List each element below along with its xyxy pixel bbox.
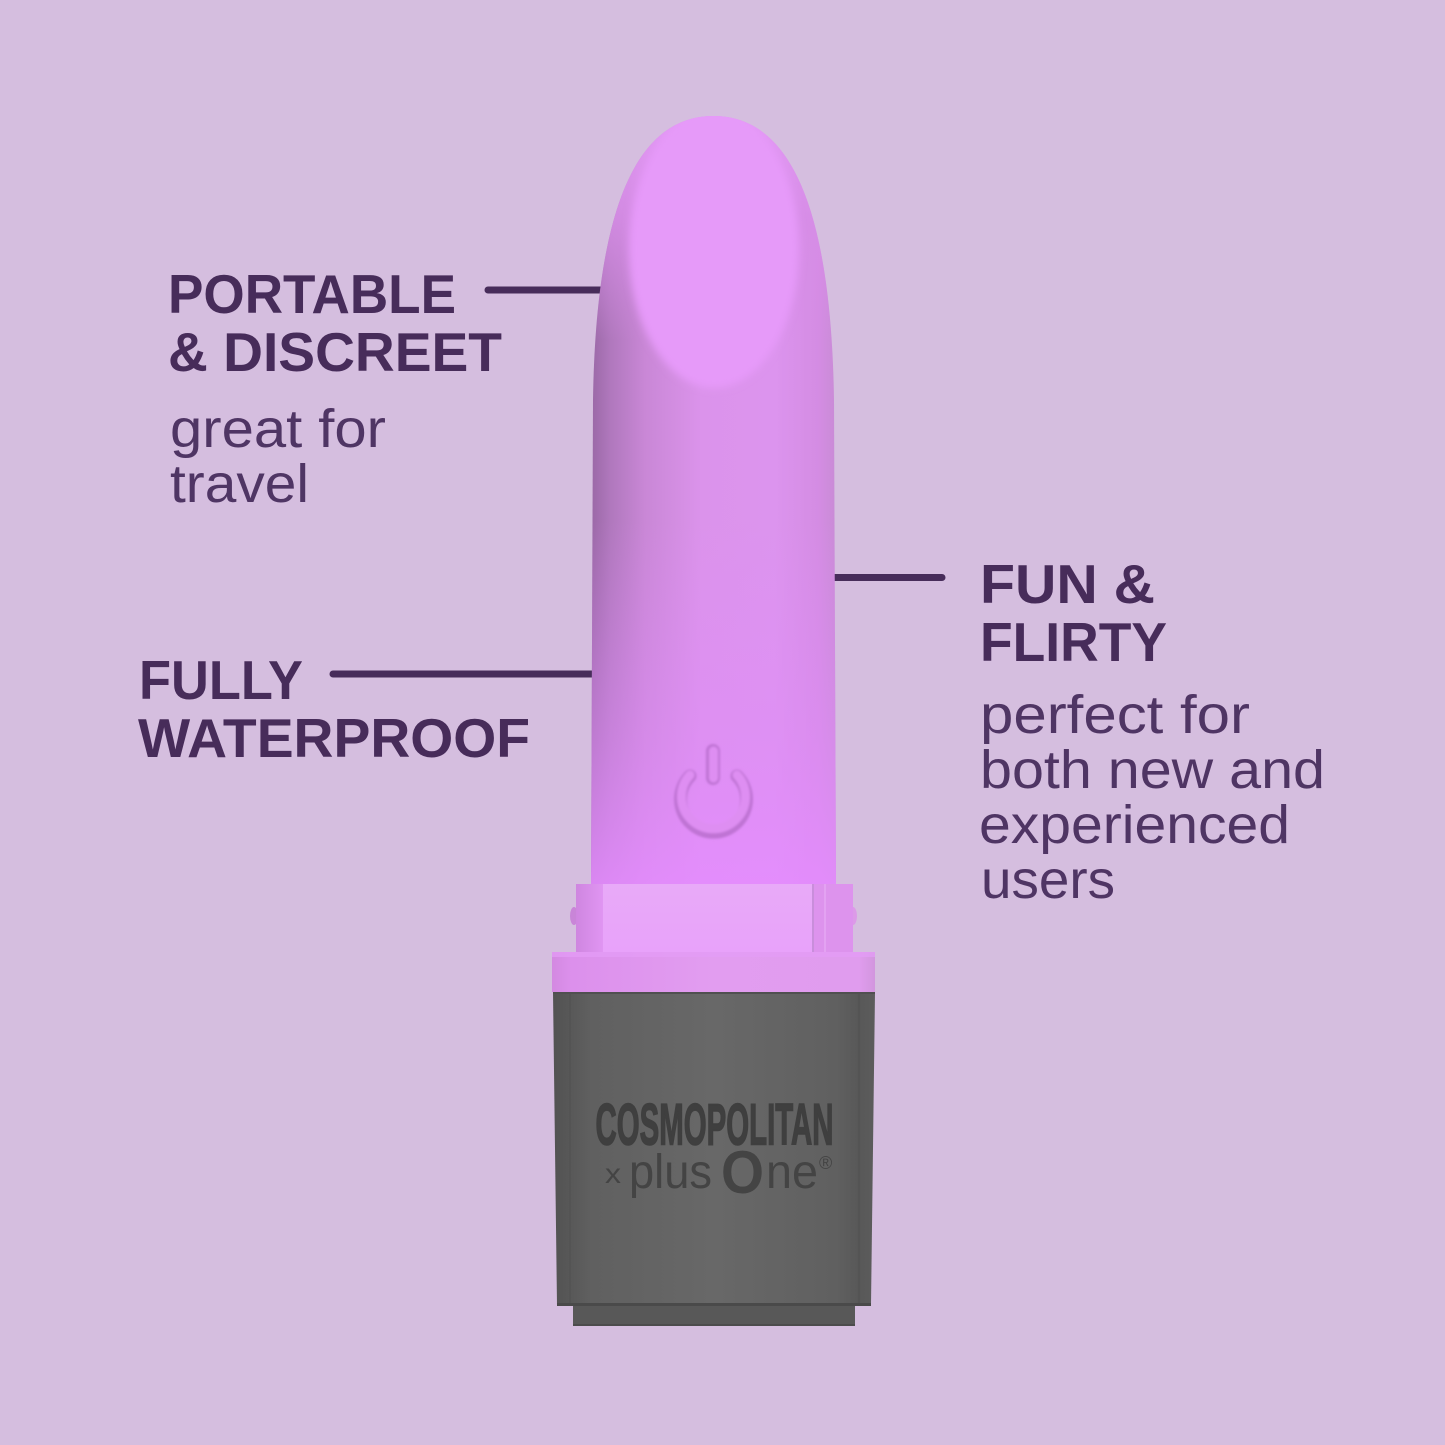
callout: fully waterproof: WATERPROOF <box>138 707 530 769</box>
product illustration <box>552 108 875 1326</box>
logo: Cosmopolitan x plusOne: ne <box>766 1146 818 1199</box>
callout: portable and discreet: travel <box>170 454 309 514</box>
leader line: fun and flirty <box>832 574 942 581</box>
collar <box>570 884 857 952</box>
callout: fun and flirty: users <box>981 850 1115 910</box>
logo: Cosmopolitan x plusOne: ® <box>819 1153 832 1173</box>
icon: power button <box>680 751 746 832</box>
callout: fun and flirty: experienced <box>979 795 1290 855</box>
callout: portable and discreet: PORTABLE <box>168 263 456 325</box>
leader line: portable <box>488 286 602 294</box>
callout: portable and discreet <box>168 263 502 514</box>
callout: portable and discreet: & DISCREET <box>168 321 502 383</box>
logo: Cosmopolitan x plusOne: COSMOPOLITAN <box>596 1092 834 1158</box>
logo: Cosmopolitan x plusOne <box>596 1092 834 1206</box>
callout: fun and flirty: both new and <box>980 740 1325 800</box>
leader line: waterproof <box>333 670 594 678</box>
callout: fun and flirty <box>979 553 1325 910</box>
grey base <box>553 992 875 1305</box>
callout: fun and flirty: FUN & <box>980 553 1155 615</box>
logo: Cosmopolitan x plusOne: x <box>605 1158 621 1189</box>
callout: fun and flirty: FLIRTY <box>980 611 1167 673</box>
callout: fully waterproof: FULLY <box>139 649 303 711</box>
grey base bottom ledge <box>557 1303 871 1326</box>
callout: fun and flirty: perfect for <box>980 685 1250 745</box>
logo: Cosmopolitan x plusOne: O <box>721 1139 764 1206</box>
callout: portable and discreet: great for <box>170 399 386 459</box>
cap rim <box>552 952 875 992</box>
lipstick bullet body <box>585 108 845 890</box>
callout: fully waterproof <box>138 649 530 769</box>
logo: Cosmopolitan x plusOne: plus <box>629 1146 712 1199</box>
